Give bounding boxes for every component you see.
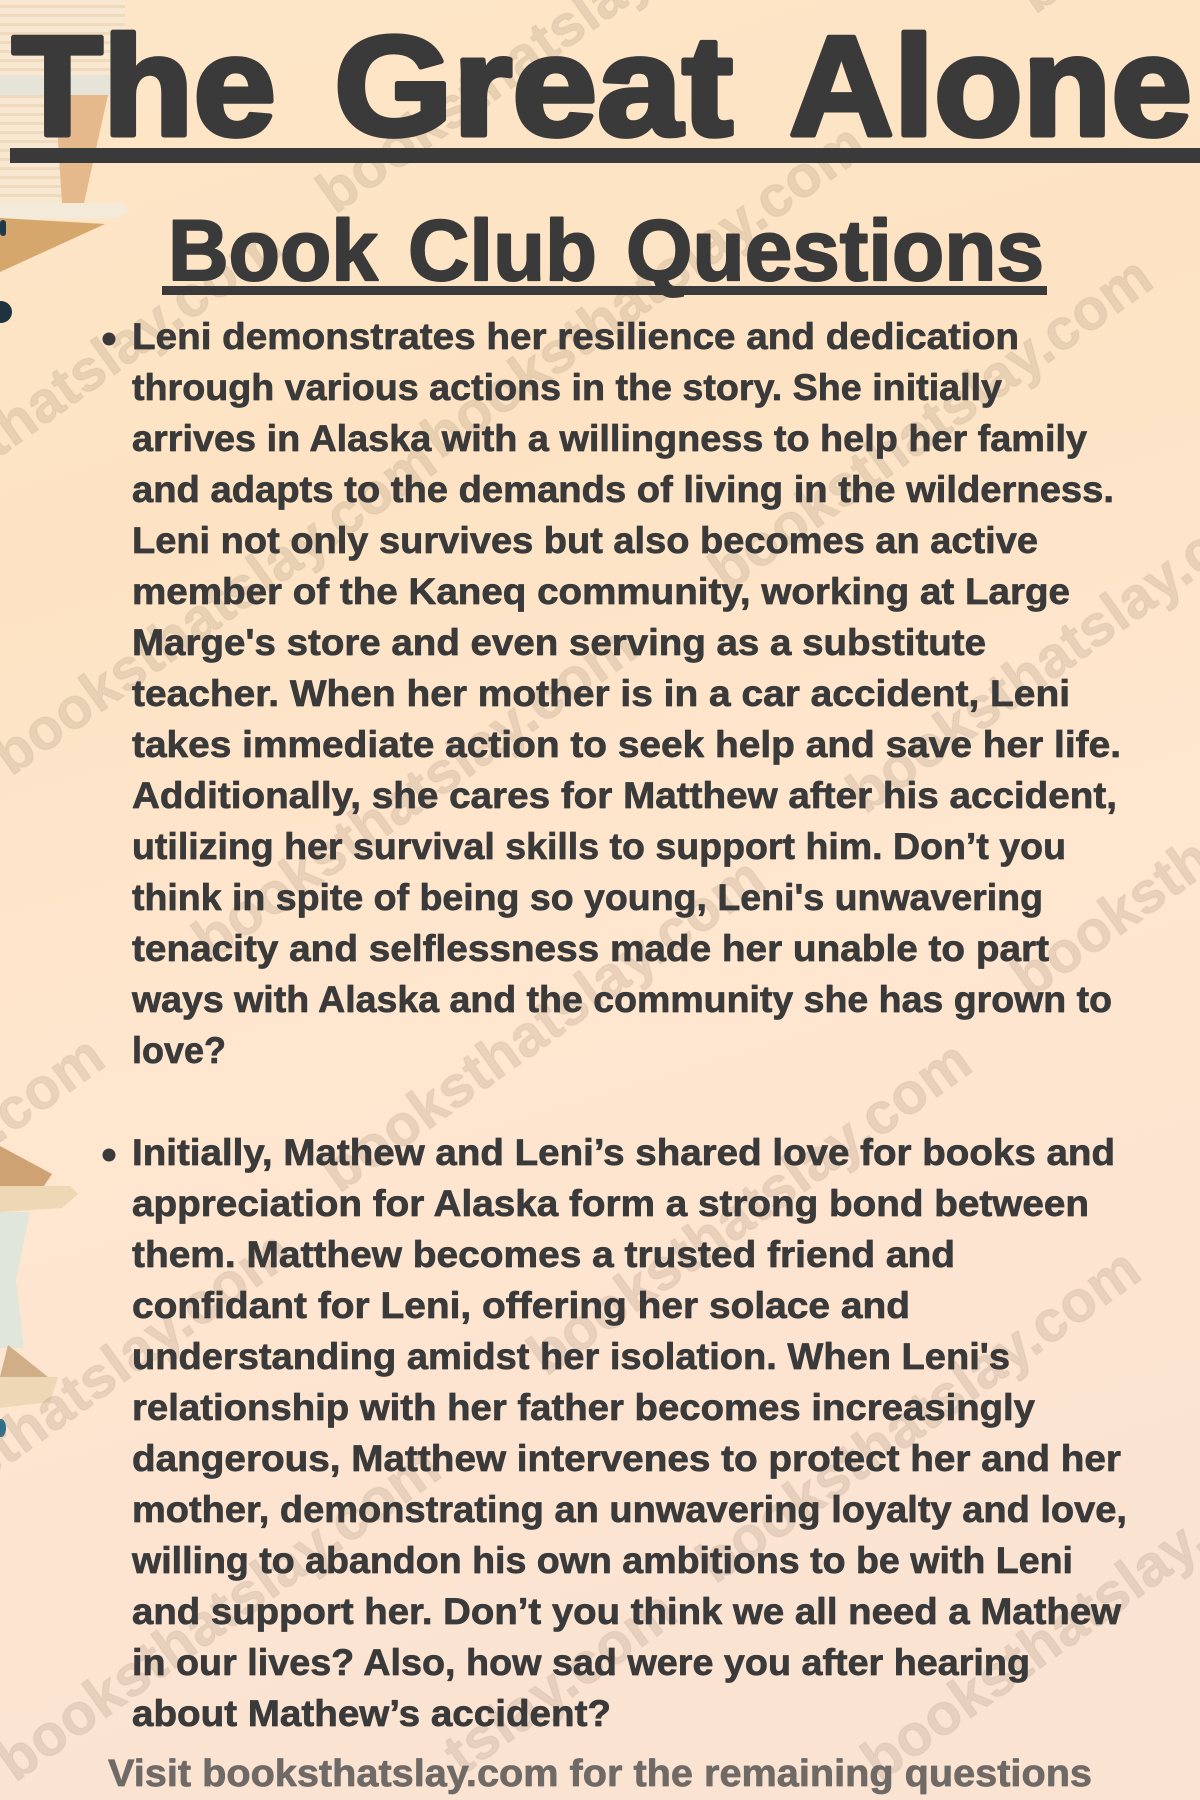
question 1: tenacity and selflessness made her unable to part bbox=[132, 928, 1049, 969]
question 2: and support her. Don’t you think we all need a Mathew bbox=[132, 1591, 1121, 1632]
watermarks: booksthatslay.com: booksthatslay.com bbox=[516, 1027, 983, 1388]
subtitle: Club bbox=[408, 203, 597, 299]
decorative book stack: top left bbox=[0, 0, 130, 323]
title: Alone bbox=[789, 7, 1192, 166]
footer link text: Visit booksthatslay.com for the remaining questions bbox=[108, 1753, 1092, 1795]
question 2: appreciation for Alaska form a strong bond between bbox=[132, 1183, 1089, 1224]
question 1: love? bbox=[132, 1030, 226, 1071]
decorative book stack: lower left bbox=[0, 1146, 78, 1437]
watermarks: booksthatslay.com: booksthatslay.com bbox=[410, 110, 877, 471]
question 1: utilizing her survival skills to support him. Don’t you bbox=[132, 826, 1066, 867]
question 1: Additionally, she cares for Matthew after his accident, bbox=[132, 775, 1117, 816]
subtitle: Questions bbox=[626, 203, 1044, 299]
question 2: about Mathew’s accident? bbox=[132, 1693, 611, 1734]
title: The bbox=[12, 7, 276, 166]
question 2: confidant for Leni, offering her solace and bbox=[132, 1285, 910, 1326]
subtitle bbox=[162, 203, 1047, 299]
question 2: understanding amidst her isolation. When Leni's bbox=[132, 1336, 1010, 1377]
question 1: Leni demonstrates her resilience and dedication bbox=[132, 316, 1019, 357]
question 2: in our lives? Also, how sad were you after hearing bbox=[132, 1642, 1030, 1683]
watermarks: booksthatslay.com: booksthatslay.com bbox=[181, 612, 648, 973]
question 1: think in spite of being so young, Leni's unwavering bbox=[132, 877, 1043, 918]
question 2: Initially, Mathew and Leni’s shared love for books and bbox=[132, 1132, 1115, 1173]
question 1: ways with Alaska and the community she has grown to bbox=[131, 979, 1112, 1020]
watermarks: booksthatslay.com: booksthatslay.com bbox=[309, 844, 776, 1205]
question 1: Leni not only survives but also becomes an active bbox=[132, 520, 1038, 561]
title bbox=[10, 7, 1200, 166]
question 2: relationship with her father becomes increasingly bbox=[132, 1387, 1035, 1428]
question 2: dangerous, Matthew intervenes to protect her and her bbox=[132, 1438, 1121, 1479]
question 1: and adapts to the demands of living in the wilderness. bbox=[132, 469, 1114, 510]
question 1: Marge's store and even serving as a substitute bbox=[132, 622, 986, 663]
question 1: arrives in Alaska with a willingness to help her family bbox=[132, 418, 1087, 459]
question 2: mother, demonstrating an unwavering loyalty and love, bbox=[132, 1489, 1127, 1530]
question 1 bbox=[102, 316, 1121, 1071]
question 1: takes immediate action to seek help and save her life. bbox=[132, 724, 1121, 765]
watermarks: booksthatslay.com: tslay.com bbox=[432, 1577, 688, 1787]
question 2: them. Matthew becomes a trusted friend and bbox=[132, 1234, 955, 1275]
subtitle: Book bbox=[168, 203, 378, 299]
watermarks: booksthatslay.com: booksthatslay.com bbox=[697, 243, 1164, 604]
question 1: teacher. When her mother is in a car accident, Leni bbox=[132, 673, 1070, 714]
question 1: member of the Kaneq community, working at Large bbox=[132, 571, 1070, 612]
watermarks: booksthatslay.com: booksthatslay.com bbox=[685, 1235, 1152, 1596]
question 2: willing to abandon his own ambitions to be with Leni bbox=[131, 1540, 1073, 1581]
question 2 bbox=[102, 1132, 1127, 1734]
title: Great bbox=[334, 7, 733, 166]
question 1: through various actions in the story. She initially bbox=[132, 367, 1002, 408]
